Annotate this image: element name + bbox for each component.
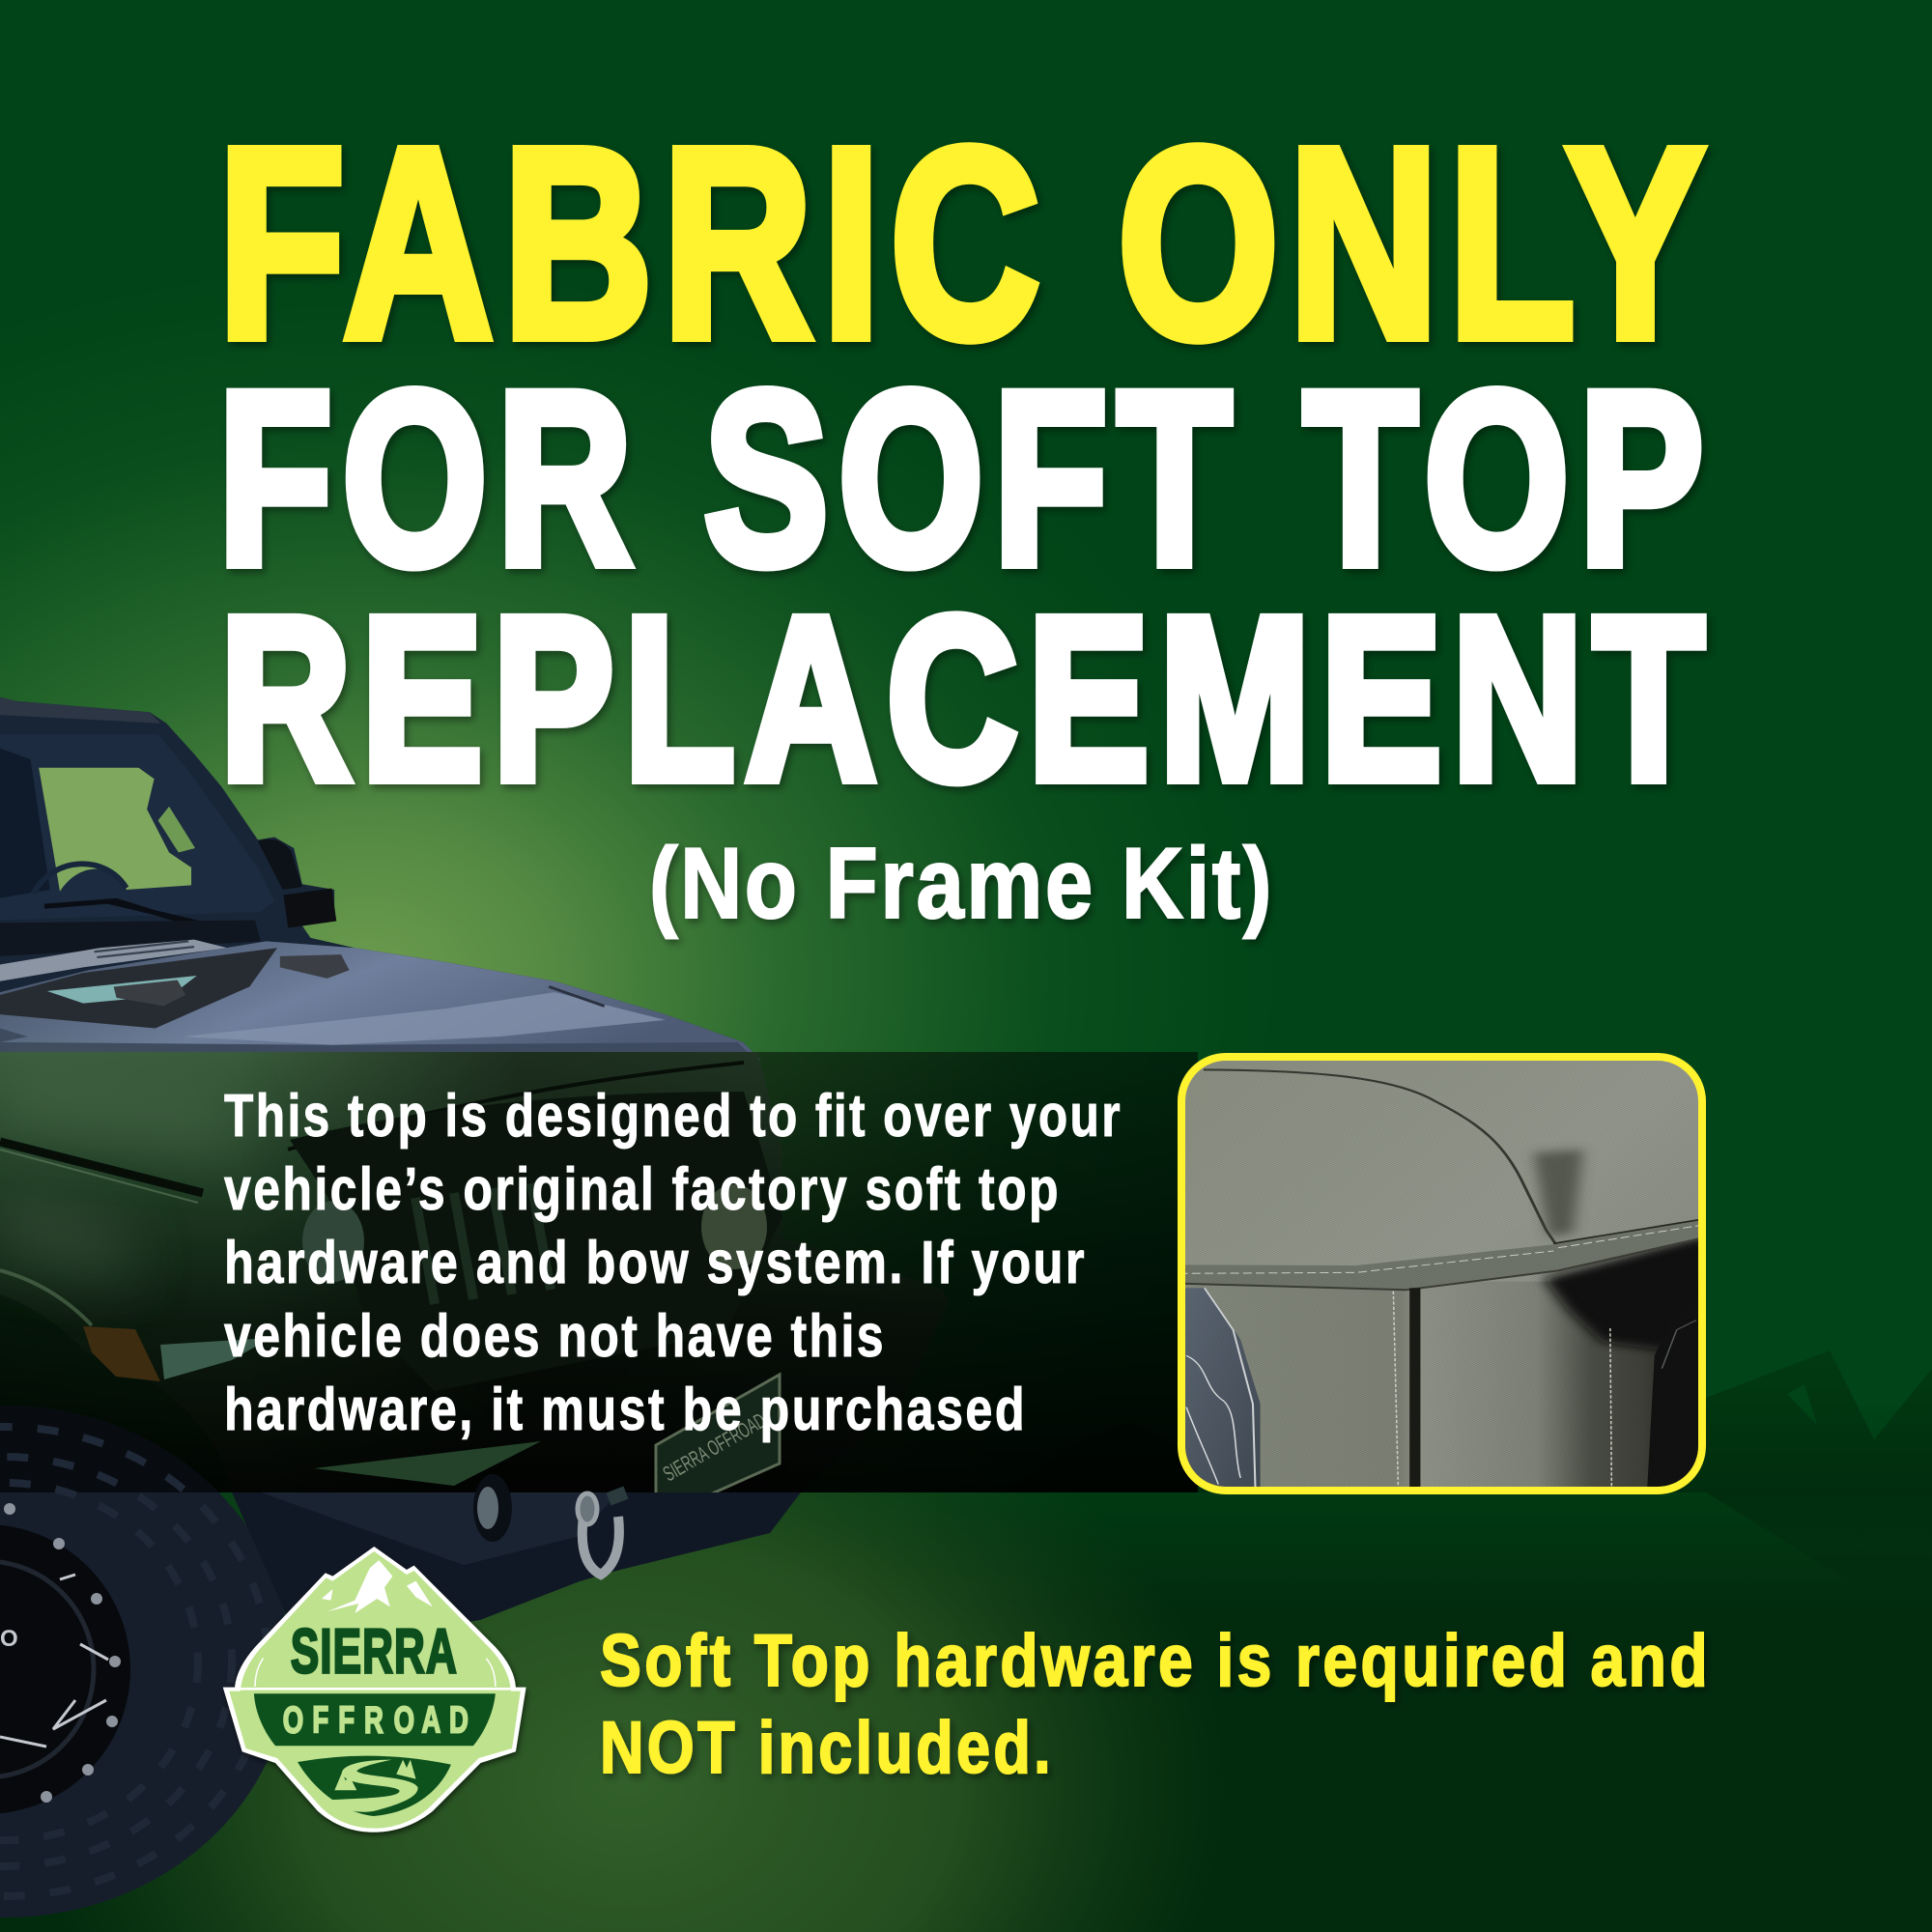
tow shackle [578, 1492, 626, 1575]
hem band [1179, 1219, 1706, 1290]
description text block [224, 1083, 1122, 1443]
description text block: vehicle’s original factory soft top [224, 1156, 1061, 1223]
winding road emblem [298, 1756, 451, 1816]
mountain silhouette [1005, 1350, 1932, 1633]
dark text band [0, 1052, 1198, 1492]
description text block: hardware and bow system. If your [224, 1230, 1087, 1296]
callout: hardware required: NOT included. [600, 1707, 1054, 1789]
mirror and light [258, 839, 302, 890]
yellow frame [1181, 1057, 1702, 1491]
fog light [473, 1474, 512, 1542]
turn signal [83, 1326, 160, 1381]
bumper wedge [314, 1441, 541, 1486]
sierra wordmark: SIERRA [291, 1615, 458, 1687]
offroad wordmark: OFFROAD [283, 1700, 469, 1742]
cowl vents [0, 940, 227, 981]
hood [0, 941, 759, 1065]
hood and fender highlights [0, 1063, 251, 1159]
tire under fender [0, 1406, 290, 1918]
callout: hardware required [600, 1620, 1711, 1789]
right window [1647, 1345, 1698, 1487]
license plate: SIERRA OFFROAD [659, 1408, 770, 1486]
left window [1179, 1288, 1261, 1491]
mountain peaks [322, 1560, 433, 1613]
window opening showing green [39, 768, 191, 892]
wheel rim [0, 1503, 130, 1814]
logo: sierra offroad badge [223, 1547, 526, 1833]
jeep lower body under band [0, 1052, 949, 1492]
jeep photo illustration [0, 697, 949, 1918]
center seam and stitching [1409, 1288, 1420, 1491]
wheel rim: O [0, 1626, 18, 1652]
inner arc lines [255, 1659, 496, 1687]
jeep upper: cab, windshield and hood [0, 697, 759, 1065]
hood crease and fender [0, 1142, 203, 1193]
license plate [656, 1375, 780, 1519]
subtitle: (No Frame Kit) [649, 828, 1274, 940]
photo panel: soft top fabric close-up [1179, 1053, 1711, 1491]
wipers [44, 900, 244, 937]
description text block: This top is designed to fit over your [224, 1083, 1122, 1150]
offroad banner [254, 1693, 496, 1746]
callout: hardware required: Soft Top hardware is required and [600, 1620, 1711, 1702]
description text block: vehicle does not have this [224, 1303, 886, 1370]
lower fabric panels [1185, 1281, 1660, 1487]
curved seam [1204, 1069, 1556, 1244]
badge body [223, 1547, 526, 1833]
description text block: hardware, it must be purchased [224, 1377, 1027, 1443]
jeep bumper lower [232, 1492, 801, 1633]
grille and headlamps [290, 1092, 782, 1391]
